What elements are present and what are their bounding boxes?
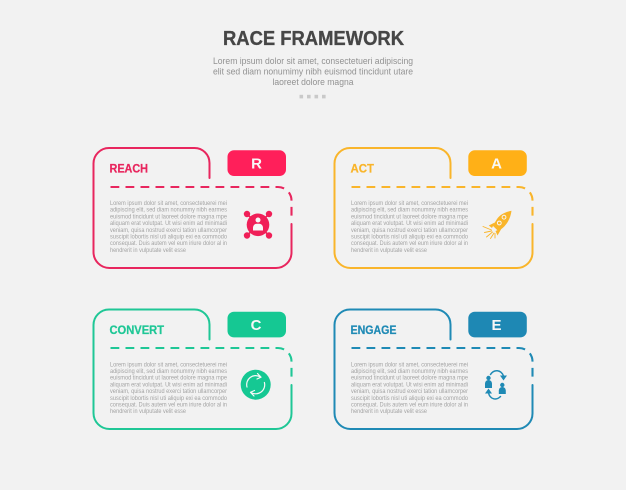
icon: rocket	[483, 211, 512, 238]
convert outline	[94, 310, 292, 429]
act body text	[351, 201, 469, 254]
reach outline	[94, 148, 292, 268]
subtitle text: elit sed diam nonumimy nibh euismod tincidunt utare	[213, 66, 413, 76]
reach body text: euismod tincidunt ut laoreet dolore magna mpe	[110, 214, 228, 220]
subtitle text: laoreet dolore magna	[272, 77, 354, 87]
convert body text: adipiscing elit, sed diam nonummy nibh earmes	[110, 369, 227, 375]
reach body text: veniam, quisa nostrud exerci tation ullamcorper	[110, 228, 227, 234]
convert body text: suscipit lobortis nisl uti aliquip exi ea commodo	[110, 396, 228, 402]
panel: engage	[334, 310, 532, 429]
convert body text	[110, 362, 228, 415]
act badge: A	[491, 156, 502, 172]
reach heading: REACH	[110, 162, 148, 176]
icon: network person	[244, 211, 272, 239]
act dashed divider	[352, 187, 532, 219]
pagination dots	[300, 95, 326, 98]
reach body text: consequat. Duis autem vel eum iriure dolor al in	[110, 241, 227, 247]
convert body text: consequat. Duis autem vel eum iriure dolor al in	[110, 402, 227, 408]
engage body text: adipiscing elit, sed diam nonummy nibh earmes	[351, 369, 468, 375]
convert body text: euismod tincidunt ut laoreet dolore magna mpe	[110, 376, 228, 382]
reach badge: R	[251, 156, 262, 172]
act body text: euismod tincidunt ut laoreet dolore magna mpe	[351, 214, 469, 220]
reach body text: suscipit lobortis nisl uti aliquip exi ea commodo	[110, 234, 228, 240]
subtitle text	[213, 56, 413, 87]
engage body text: veniam, quisa nostrud exerci tation ullamcorper	[351, 389, 468, 395]
icon: refresh circle	[241, 370, 271, 400]
reach body text	[110, 201, 228, 254]
convert dashed divider	[110, 348, 292, 380]
reach body text: Lorem ipsum dolor sit amet, consectetuerei mei	[110, 201, 227, 207]
act body text: consequat. Duis autem vel eum iriure dolor al in	[351, 241, 468, 247]
act outline	[334, 148, 532, 268]
icon: people exchange	[485, 371, 507, 399]
convert body text: aliquam erat volutpat. Ut wisi enim ad minimadi	[110, 382, 227, 388]
subtitle text: Lorem ipsum dolor sit amet, consectetueri adipiscing	[213, 56, 413, 66]
engage body text: consequat. Duis autem vel eum iriure dolor al in	[351, 402, 468, 408]
reach body text: hendrerit in vulputate velit esse	[110, 248, 187, 254]
engage badge: E	[491, 317, 502, 334]
title: RACE FRAMEWORK	[223, 27, 404, 50]
act body text: Lorem ipsum dolor sit amet, consectetuerei mei	[351, 201, 468, 207]
convert body text: hendrerit in vulputate velit esse	[110, 409, 187, 415]
engage body text: euismod tincidunt ut laoreet dolore magna mpe	[351, 376, 469, 382]
engage outline	[334, 310, 532, 429]
convert body text: Lorem ipsum dolor sit amet, consectetuerei mei	[110, 362, 227, 368]
convert badge: C	[251, 317, 262, 334]
act heading: ACT	[350, 162, 375, 176]
engage heading: ENGAGE	[350, 323, 396, 337]
reach body text: adipiscing elit, sed diam nonummy nibh earmes	[110, 208, 227, 214]
act body text: suscipit lobortis nisl uti aliquip exi ea commodo	[351, 234, 469, 240]
panel: convert	[94, 310, 292, 429]
engage body text: suscipit lobortis nisl uti aliquip exi ea commodo	[351, 396, 469, 402]
convert badge	[228, 312, 286, 337]
panel: reach	[94, 148, 292, 268]
engage dashed divider	[352, 348, 532, 380]
act body text: aliquam erat volutpat. Ut wisi enim ad minimadi	[351, 221, 468, 227]
panel: act	[334, 148, 532, 268]
convert body text: veniam, quisa nostrud exerci tation ullamcorper	[110, 389, 227, 395]
convert heading: CONVERT	[110, 323, 165, 337]
engage badge	[468, 312, 527, 337]
act body text: adipiscing elit, sed diam nonummy nibh earmes	[351, 208, 468, 214]
engage body text: Lorem ipsum dolor sit amet, consectetuerei mei	[351, 362, 468, 368]
engage body text	[351, 362, 469, 415]
engage body text: aliquam erat volutpat. Ut wisi enim ad minimadi	[351, 382, 468, 388]
reach body text: aliquam erat volutpat. Ut wisi enim ad minimadi	[110, 221, 227, 227]
act body text: hendrerit in vulputate velit esse	[351, 248, 428, 254]
reach badge	[228, 150, 286, 176]
act badge	[468, 150, 527, 176]
act body text: veniam, quisa nostrud exerci tation ullamcorper	[351, 228, 468, 234]
reach dashed divider	[110, 187, 292, 219]
engage body text: hendrerit in vulputate velit esse	[351, 409, 428, 415]
